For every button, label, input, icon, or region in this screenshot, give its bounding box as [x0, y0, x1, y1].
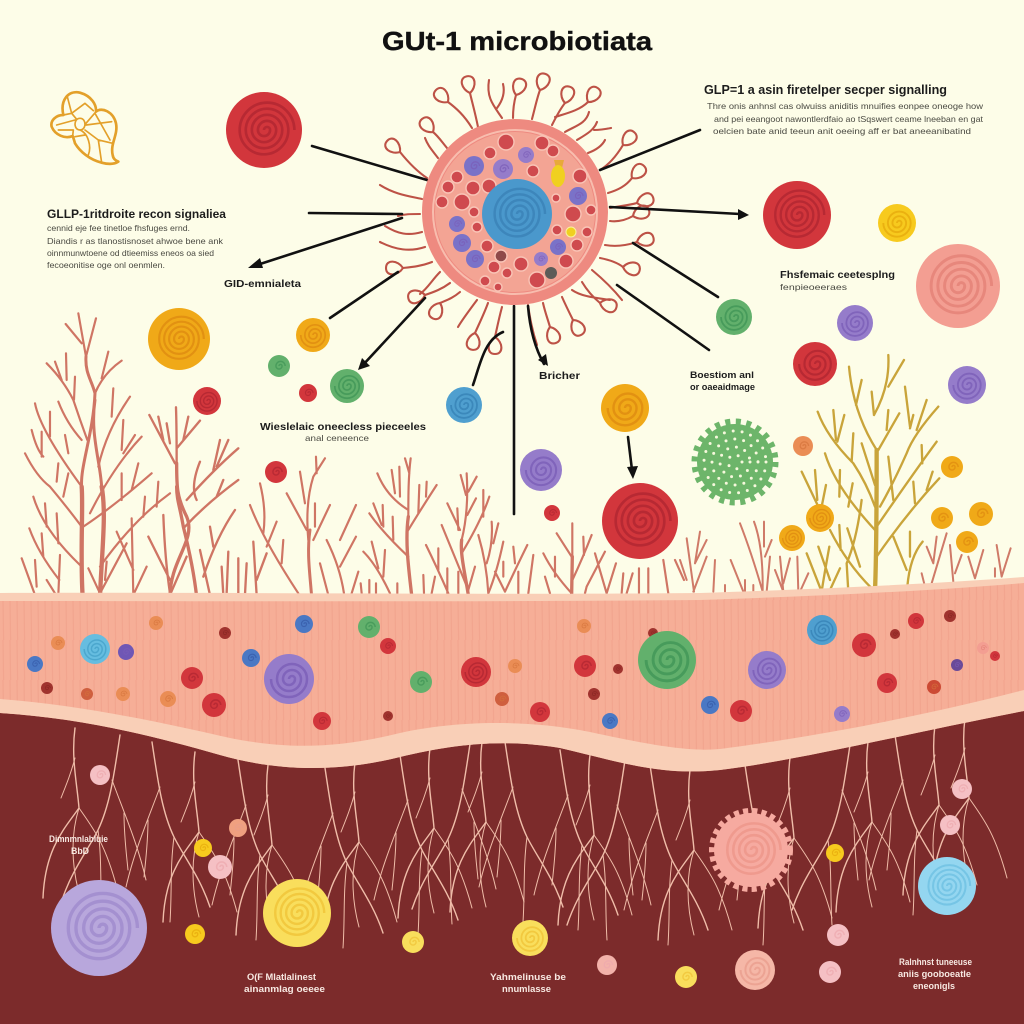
microbes in tissue band	[27, 610, 1000, 730]
label: lower centre	[490, 972, 566, 994]
label: lower centre-left: O(F Mlatlalinest	[247, 972, 316, 982]
text block: left: fecoeonitise oge onl oenmlen.	[47, 260, 165, 270]
label: lower left	[49, 834, 108, 856]
central cell	[422, 119, 608, 305]
label: lower right: aniis gooboeatle	[898, 969, 971, 979]
label: lower centre-left: ainanmlag oeeee	[244, 984, 325, 994]
wavy membrane between band and dark layer	[0, 690, 1024, 771]
tree: yellow branching tree	[802, 355, 939, 592]
title: GUt-1 microbiotiata	[382, 26, 653, 56]
label: Boestiom: or oaeaidmage	[690, 382, 755, 393]
roots: branching nerve fibres	[43, 718, 1007, 948]
label: lower left: Dimnmnlabluie	[49, 834, 108, 844]
text block: left	[47, 209, 227, 270]
text block: right top	[704, 83, 984, 136]
tree: second pink tree	[148, 407, 267, 597]
text block: right top: Thre onis anhnsl cas olwuiss aniditis mnuifies eonpee oneoge how	[707, 101, 984, 111]
label: Boestiom: Boestiom anl	[690, 370, 754, 381]
label: right middle: Fhsfemaic ceetesplng	[780, 270, 895, 281]
label: Bricher: Bricher	[539, 371, 580, 382]
tree: third pink tree	[250, 457, 344, 597]
cell organelles: purple vesicles	[449, 147, 587, 268]
text block: left: cennid eje fee tinetloe fhsfuges ernd.	[47, 223, 190, 233]
floating microbes: upper area	[148, 92, 1000, 559]
microbes in dark layer	[51, 765, 976, 990]
panel: pink tissue band	[0, 577, 1024, 771]
cell nucleus	[482, 179, 552, 249]
label: right middle	[780, 270, 895, 292]
cell organelles: red vesicles	[436, 134, 596, 291]
cell filaments with looped tips	[380, 72, 655, 354]
icon: yellow tangled organism	[51, 92, 118, 164]
label: lower right: eneonigls	[913, 981, 955, 991]
label: Boestiom	[690, 370, 755, 393]
label: right middle: fenpieoeeraes	[780, 282, 847, 292]
text block: right top: and pei eeangoot nawontlerdfaio ao tSqswert ceame lneeban en gat	[714, 114, 984, 124]
label: lower centre-left	[244, 972, 325, 994]
label: lower right: Ralnhnst tuneeuse	[899, 957, 972, 967]
icon: green spiky microbe	[695, 422, 775, 502]
tree: left large pink tree	[22, 313, 170, 597]
shrubs: centre row	[340, 458, 684, 595]
label: Wieslelaic	[260, 421, 426, 443]
label: lower centre: Yahmelinuse be	[490, 972, 566, 982]
text block: left: oinnmunwtoene od dtieemiss eneos oa sied	[47, 248, 214, 258]
label: GID-emnialeta: GID-emnialeta	[224, 278, 301, 290]
label: lower right	[898, 957, 972, 991]
label: lower centre: nnumlasse	[502, 984, 551, 994]
shrubs: right pink row	[680, 522, 1011, 592]
text block: left: Diandis r as tlanostisnoset ahwoe bene ank	[47, 236, 224, 246]
text block: right top: GLP=1 a asin firetelper secper signalling	[704, 83, 947, 97]
label: Wieslelaic: Wieslelaic oneecless pieceeles	[260, 421, 426, 433]
label: lower left: BbD	[71, 846, 89, 856]
text block: right top: oelcien bate anid teeun anit oeeing aff er bat aneeanibatind	[713, 126, 971, 136]
lower dark tissue layer	[0, 680, 1024, 1024]
text block: left: GLLP-1ritdroite recon signaliea	[47, 209, 227, 221]
label: Wieslelaic: anal ceneence	[305, 433, 369, 443]
black arrows and connector lines	[248, 130, 749, 514]
icon: pink spiky microbe	[713, 812, 789, 888]
yellow organelle	[545, 160, 576, 279]
